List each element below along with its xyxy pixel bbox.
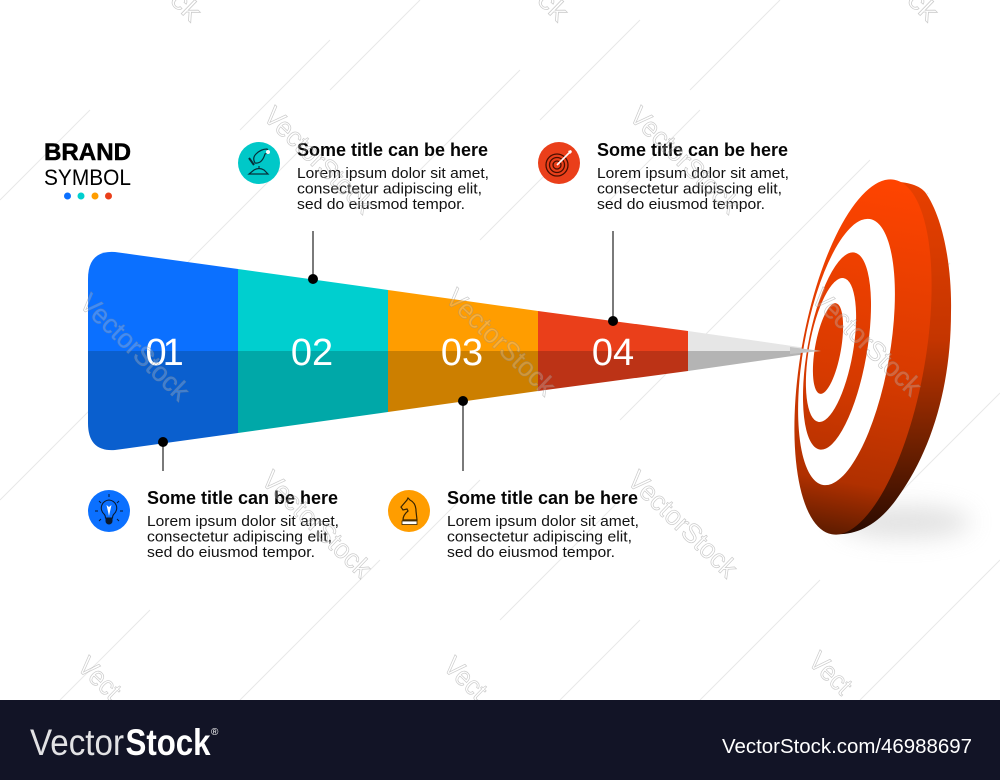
callout text — [597, 166, 789, 213]
callout text: sed do eiusmod tempor. — [597, 197, 765, 213]
brand word: BRAND — [44, 139, 131, 166]
number 02: 02 — [291, 332, 333, 374]
target shadow — [839, 506, 971, 538]
segment 02 — [238, 269, 388, 433]
callout text: consectetur adipiscing elit, — [147, 530, 332, 546]
callout text — [297, 166, 489, 213]
watermarks: VectorStock — [806, 283, 928, 402]
arrow tip — [688, 331, 820, 371]
watermarks: VectorStock — [74, 288, 196, 407]
watermarks: Vect — [803, 646, 859, 701]
callout 01 — [88, 487, 339, 561]
arrow point on target — [790, 347, 821, 354]
callout 04 — [538, 139, 789, 213]
middle red ring — [790, 247, 884, 455]
icon: light bulb — [88, 490, 130, 532]
footer logo: Vector — [30, 722, 124, 763]
connector 04 — [608, 231, 618, 326]
footer url: VectorStock.com/46988697 — [722, 736, 972, 758]
funnel chart — [88, 252, 820, 450]
number 01: 01 — [146, 332, 183, 374]
brand logo — [44, 139, 131, 200]
callout text — [447, 514, 639, 561]
watermarks: VectorStock — [440, 283, 562, 402]
watermarks: VectorStock — [256, 465, 378, 584]
bullseye — [807, 301, 849, 396]
number 04: 04 — [592, 332, 634, 374]
icon: chess knight — [388, 490, 430, 532]
callout text: consectetur adipiscing elit, — [597, 182, 782, 198]
callout text: Lorem ipsum dolor sit amet, — [597, 166, 789, 182]
segment 01 — [88, 252, 238, 450]
callout text: Lorem ipsum dolor sit amet, — [147, 514, 339, 530]
footer logo: ® — [211, 727, 219, 738]
callout title: Some title can be here — [447, 487, 638, 508]
callout text: Lorem ipsum dolor sit amet, — [447, 514, 639, 530]
watermarks: VectorStock — [624, 101, 746, 220]
watermarks: Vect — [438, 651, 494, 706]
brand dots — [64, 192, 112, 200]
icon: microscope — [238, 142, 280, 184]
segment 04 — [538, 311, 688, 391]
callout text: sed do eiusmod tempor. — [147, 545, 315, 561]
connector 01 — [158, 437, 168, 471]
callout 02 — [238, 139, 489, 213]
callout title: Some title can be here — [297, 139, 488, 160]
symbol word: SYMBOL — [44, 165, 131, 190]
segment 03 — [388, 290, 538, 412]
inner white ring — [797, 274, 865, 426]
watermarks: VectorStock — [258, 101, 380, 220]
footer bar — [0, 700, 1000, 780]
callout text: sed do eiusmod tempor. — [447, 545, 615, 561]
callout text — [147, 514, 339, 561]
number 03: 03 — [441, 332, 483, 374]
connector 03 — [458, 396, 468, 471]
callout text: consectetur adipiscing elit, — [297, 182, 482, 198]
callout text: sed do eiusmod tempor. — [297, 197, 465, 213]
callout 03 — [388, 487, 639, 561]
outer white ring — [781, 212, 912, 492]
callout title: Some title can be here — [147, 487, 338, 508]
icon: target and dart — [538, 142, 580, 184]
target — [771, 169, 971, 545]
callout text: consectetur adipiscing elit, — [447, 530, 632, 546]
footer logo — [30, 722, 219, 763]
connector 02 — [308, 231, 318, 284]
watermarks: VectorStock — [622, 465, 744, 584]
callout text: Lorem ipsum dolor sit amet, — [297, 166, 489, 182]
callout title: Some title can be here — [597, 139, 788, 160]
watermarks: Vect — [72, 651, 128, 706]
target rim — [833, 181, 951, 534]
watermarks — [72, 0, 945, 706]
target face — [771, 169, 955, 545]
footer logo: Stock — [126, 722, 211, 763]
